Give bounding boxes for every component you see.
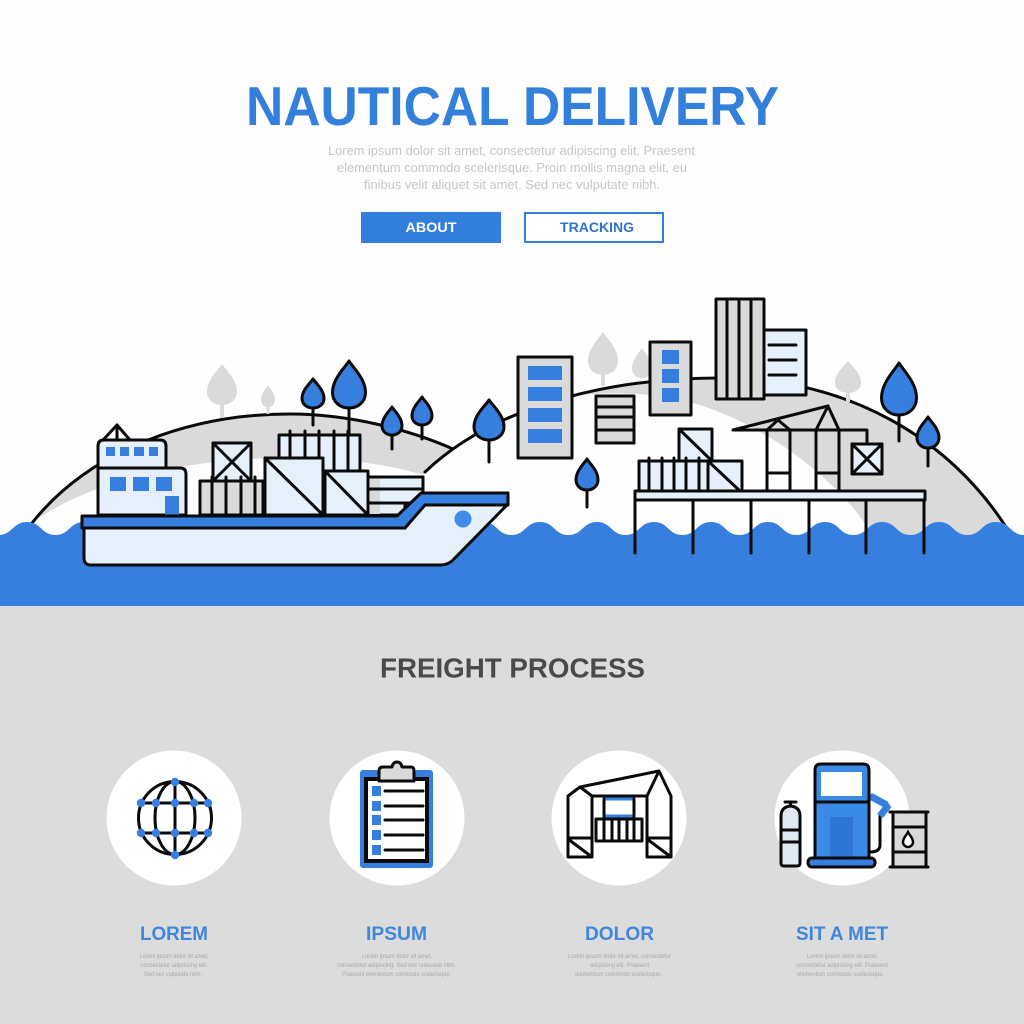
description: dolor: elementum commodo scelerisque. xyxy=(575,971,662,978)
hull xyxy=(84,505,507,565)
label: dolor: DOLOR xyxy=(585,924,654,945)
description: lorem xyxy=(140,953,209,978)
pier with crane and cargo xyxy=(639,406,882,491)
intro text block: elementum commodo scelerisque. Proin mollis magna elit, eu xyxy=(337,161,687,175)
cabin xyxy=(98,425,186,515)
deck stripe xyxy=(82,493,508,528)
label: ipsum: IPSUM xyxy=(366,924,427,945)
button: about xyxy=(361,212,501,243)
city buildings xyxy=(518,299,806,458)
icon: globe xyxy=(106,750,242,886)
cargo ship xyxy=(82,425,508,565)
step 1: globe xyxy=(106,750,242,978)
oil barrel xyxy=(890,812,928,867)
background hills xyxy=(32,378,1012,540)
description: ipsum xyxy=(337,953,456,978)
title: NAUTICAL DELIVERY xyxy=(246,75,779,137)
step 3: gantry crane xyxy=(552,750,686,978)
icon: clipboard xyxy=(330,750,464,886)
building with four windows xyxy=(518,357,572,458)
label: sit a met: SIT A MET xyxy=(796,924,888,945)
description: lorem: Lorem ipsum dolor sit amet, xyxy=(140,953,209,960)
description: ipsum: Praesent elementum commodo scelerisque. xyxy=(342,971,451,978)
description: sit a met xyxy=(796,953,888,978)
step 4: fuel station xyxy=(774,750,928,978)
button: about: ABOUT xyxy=(406,219,457,235)
blue trees xyxy=(302,361,939,507)
grey background trees xyxy=(207,332,861,418)
section heading: FREIGHT PROCESS xyxy=(380,652,645,684)
small striped building xyxy=(596,396,634,443)
icon: fuel station xyxy=(774,750,928,886)
description: sit a met: Lorem ipsum dolor sit amet, xyxy=(807,953,878,960)
intro text block: Lorem ipsum dolor sit amet, consectetur adipiscing elit. Praesent xyxy=(328,144,696,158)
building with three windows xyxy=(650,342,691,415)
label: lorem: LOREM xyxy=(140,924,208,945)
description: dolor: adipiscing elit. Praesent xyxy=(590,962,649,969)
lower panel xyxy=(0,606,1024,1024)
description: dolor: Lorem ipsum dolor sit amet, consectetur xyxy=(568,953,671,960)
gas cylinder xyxy=(781,802,800,866)
pier deck and legs xyxy=(635,491,925,553)
water xyxy=(0,522,1024,606)
description: sit a met: elementum commodo scelerisque. xyxy=(797,971,884,978)
description: ipsum: consectetur adipiscing. Sed nec vulputate nibh. xyxy=(337,962,456,969)
description: sit a met: consectetur adipiscing elit. Praesent xyxy=(796,962,888,969)
description: ipsum: Lorem ipsum dolor sit amet, xyxy=(362,953,432,960)
description: lorem: Sed nec vulputate nibh. xyxy=(144,971,202,978)
crane xyxy=(733,406,882,491)
icon: gantry crane xyxy=(552,750,686,886)
fuel pump xyxy=(808,764,887,867)
step 2: clipboard xyxy=(330,750,464,978)
porthole xyxy=(454,510,472,528)
intro text block xyxy=(328,144,696,192)
pier cargo xyxy=(639,429,742,491)
intro text block: finibus velit aliquet sit amet. Sed nec vulputate nibh. xyxy=(364,178,660,192)
tall building and annex xyxy=(716,299,806,399)
button: tracking xyxy=(525,213,663,242)
description: lorem: consectetur adipiscing elit. xyxy=(140,962,208,969)
description: dolor xyxy=(568,953,671,978)
deck cargo xyxy=(200,431,423,515)
button: tracking: TRACKING xyxy=(560,219,634,235)
